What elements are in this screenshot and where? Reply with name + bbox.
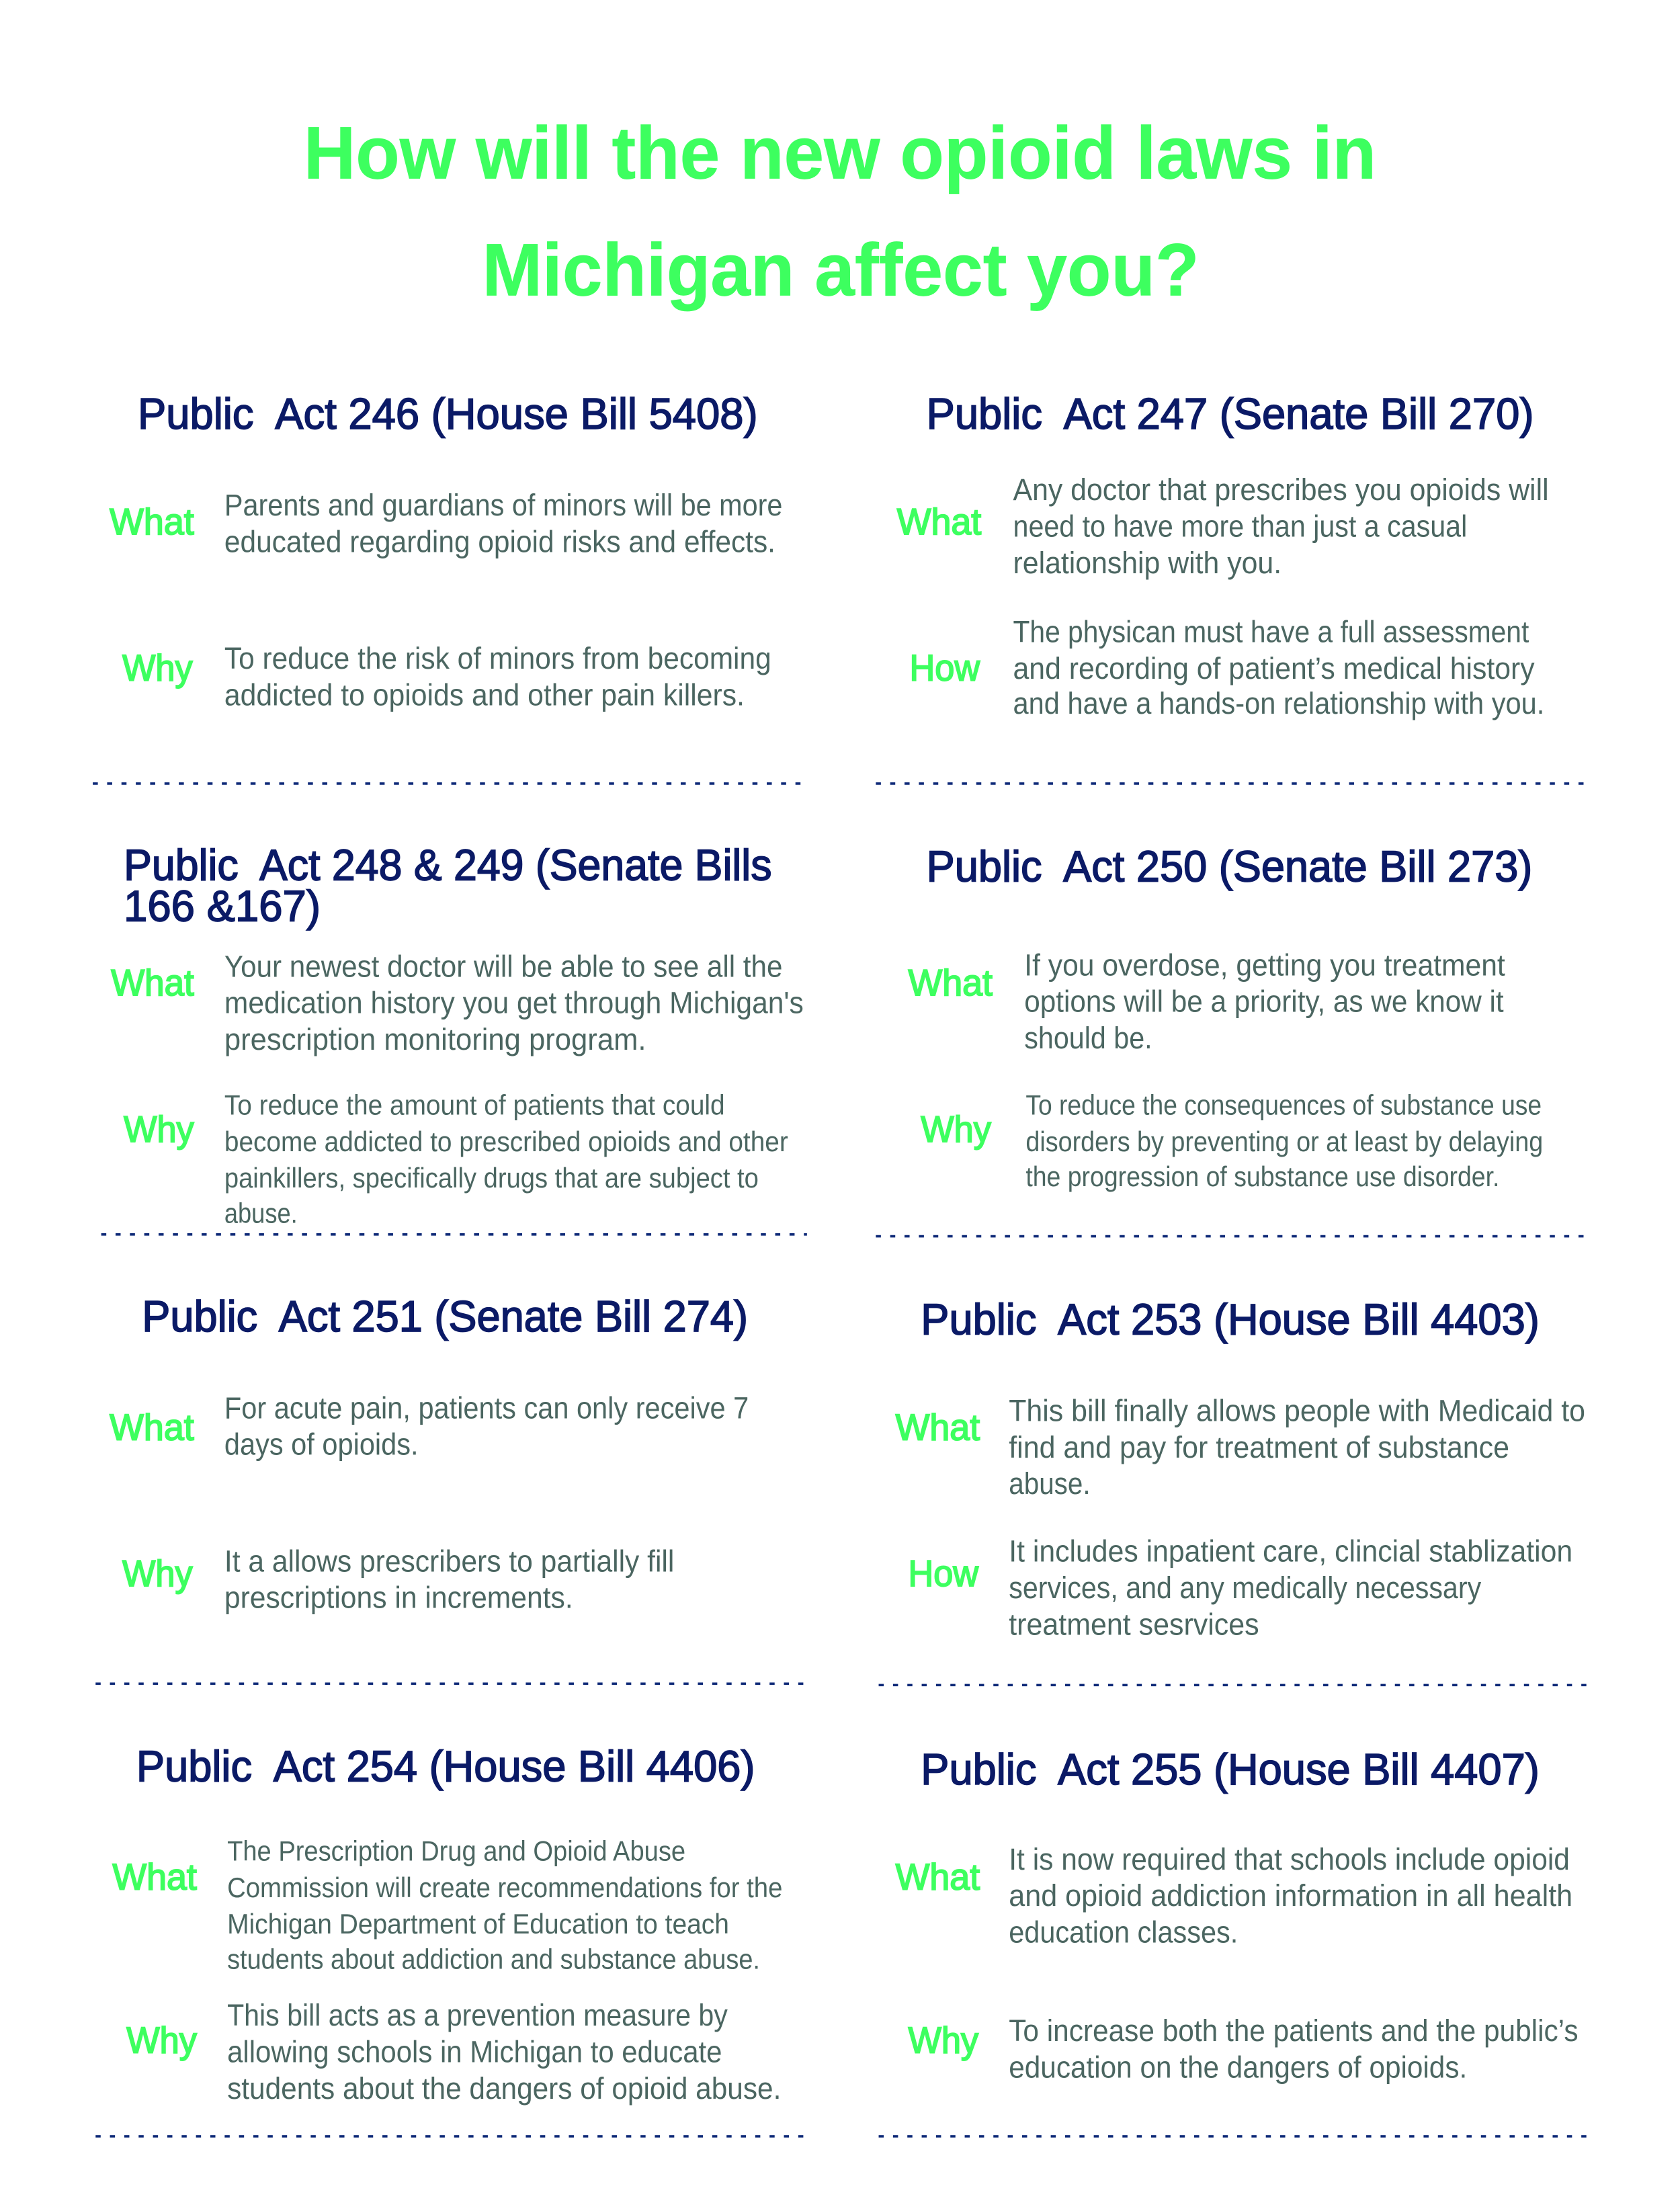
text block: why: the progression of substance use disorder. xyxy=(1025,1161,1499,1192)
text block: what: relationship with you. xyxy=(1013,546,1282,580)
label: What: What xyxy=(110,501,194,542)
label: Why: Why xyxy=(908,2020,979,2061)
panel: Public Act 251 xyxy=(110,1292,749,1615)
heading: Public Act 250: Public Act 250 (Senate Bill 273) xyxy=(927,842,1532,891)
text block: what: Your newest doctor will be able to see all the xyxy=(224,949,782,983)
text block: how: and recording of patient’s medical history xyxy=(1013,651,1535,685)
text block: what: Any doctor that prescribes you opioids will xyxy=(1013,472,1549,507)
label: Why: Why xyxy=(124,1109,194,1150)
label: What: What xyxy=(896,1857,980,1898)
text block: what: The Prescription Drug and Opioid Abuse xyxy=(227,1835,685,1867)
text block: why: To increase both the patients and the public’s xyxy=(1009,2013,1579,2048)
heading: Public Act 248 & 249: Public Act 248 & 249 (Senate Bills xyxy=(124,841,772,890)
text block: what: medication history you get through Michigan's xyxy=(224,986,804,1020)
text block: what: educated regarding opioid risks and effects. xyxy=(224,525,775,559)
text block: what: days of opioids. xyxy=(224,1427,419,1462)
text block: why: disorders by preventing or at least by delaying xyxy=(1025,1126,1543,1157)
text block: what: Michigan Department of Education to teach xyxy=(227,1908,729,1940)
text block: what: options will be a priority, as we know it xyxy=(1024,985,1504,1019)
label: What: What xyxy=(110,1407,194,1448)
heading: Public Act 253: Public Act 253 (House Bill 4403) xyxy=(921,1294,1540,1343)
text block: why xyxy=(224,1089,788,1229)
label: How: How xyxy=(908,1553,979,1594)
panel: Public Act 254 xyxy=(112,1742,782,2106)
panel: Public Act 246 xyxy=(110,389,782,712)
text block: why: allowing schools in Michigan to educate xyxy=(227,2034,722,2069)
heading: Public Act 255: Public Act 255 (House Bill 4407) xyxy=(921,1745,1540,1794)
heading: Public Act 246: Public Act 246 (House Bill 5408) xyxy=(138,389,758,438)
title: How will the new opioid laws in xyxy=(304,112,1376,195)
label: What: What xyxy=(897,501,981,542)
text block: why: become addicted to prescribed opioids and other xyxy=(224,1126,788,1157)
text block: what: For acute pain, patients can only receive 7 xyxy=(224,1390,749,1425)
heading: Public Act 251: Public Act 251 (Senate Bill 274) xyxy=(142,1292,748,1341)
panel: Public Act 255 xyxy=(896,1745,1579,2084)
text block: what: Commission will create recommendations for the xyxy=(227,1872,782,1903)
text block: what xyxy=(1024,948,1505,1055)
text block: why: students about the dangers of opioid abuse. xyxy=(227,2071,781,2106)
heading: Public Act 254: Public Act 254 (House Bill 4406) xyxy=(136,1742,755,1791)
label: Why: Why xyxy=(921,1109,992,1150)
heading: Public Act 248 & 249: 166 &167) xyxy=(124,881,321,930)
text block: what xyxy=(224,949,804,1056)
text block: why: It a allows prescribers to partially fill xyxy=(224,1544,674,1578)
text block: why: To reduce the consequences of substance use xyxy=(1025,1089,1542,1120)
heading: Public Act 247: Public Act 247 (Senate Bill 270) xyxy=(927,389,1534,438)
panel: Public Act 253 xyxy=(896,1294,1585,1641)
text block: why: prescriptions in increments. xyxy=(224,1581,573,1615)
text block: how: It includes inpatient care, clincial stablization xyxy=(1009,1534,1572,1569)
text block: why: To reduce the risk of minors from becoming xyxy=(224,641,771,675)
label: Why: Why xyxy=(122,1553,193,1594)
text block: what: abuse. xyxy=(1009,1466,1091,1501)
text block: what: find and pay for treatment of substance xyxy=(1009,1430,1509,1464)
text block: why: education on the dangers of opioids. xyxy=(1009,2050,1467,2084)
label: How: How xyxy=(910,648,980,689)
text block: what xyxy=(227,1835,782,1974)
text block: how xyxy=(1013,614,1544,720)
text block: what xyxy=(1009,1393,1585,1501)
heading: Public Act 248 & 249 xyxy=(124,841,772,930)
text block: how: services, and any medically necessary xyxy=(1009,1571,1482,1605)
text block: why xyxy=(227,1998,781,2106)
label: What: What xyxy=(112,1857,197,1898)
text block: why: To reduce the amount of patients that could xyxy=(224,1089,725,1120)
text block: why xyxy=(1025,1089,1543,1192)
panel: Public Act 250 xyxy=(908,842,1543,1192)
label: What: What xyxy=(908,962,993,1003)
panel: Public Act 248 & 249 xyxy=(111,841,804,1229)
text block: what: Parents and guardians of minors will be more xyxy=(224,488,782,522)
text block: what: education classes. xyxy=(1009,1915,1238,1950)
text block: why xyxy=(224,641,771,712)
text block: what: prescription monitoring program. xyxy=(224,1022,646,1056)
text block: how: treatment sesrvices xyxy=(1009,1607,1259,1641)
text block: how: The physican must have a full assessment xyxy=(1013,614,1529,649)
text block: why: painkillers, specifically drugs that are subject to xyxy=(224,1162,759,1194)
title: Michigan affect you? xyxy=(482,228,1200,311)
text block: how xyxy=(1009,1534,1572,1641)
text block: what: If you overdose, getting you treatment xyxy=(1024,948,1505,982)
text block: what: It is now required that schools include opioid xyxy=(1009,1842,1570,1876)
text block: what: should be. xyxy=(1024,1021,1152,1055)
text block: what xyxy=(224,1390,749,1462)
title xyxy=(304,112,1376,311)
label: What: What xyxy=(111,962,194,1003)
text block: what xyxy=(1009,1842,1572,1950)
text block: why: This bill acts as a prevention measure by xyxy=(227,1998,728,2032)
text block: how: and have a hands-on relationship with you. xyxy=(1013,686,1544,720)
text block: what xyxy=(224,488,782,559)
text block: what: This bill finally allows people with Medicaid to xyxy=(1009,1393,1585,1427)
label: What: What xyxy=(896,1407,980,1448)
text block: what: need to have more than just a casual xyxy=(1013,509,1467,544)
text block: why xyxy=(224,1544,674,1615)
text block: what xyxy=(1013,472,1549,580)
text block: why: addicted to opioids and other pain killers. xyxy=(224,678,745,712)
text block: what: students about addiction and substance abuse. xyxy=(227,1943,760,1974)
label: Why: Why xyxy=(126,2020,198,2061)
text block: why xyxy=(1009,2013,1579,2084)
panel: Public Act 247 xyxy=(897,389,1549,720)
text block: what: and opioid addiction information in all health xyxy=(1009,1878,1572,1913)
text block: why: abuse. xyxy=(224,1197,298,1229)
label: Why: Why xyxy=(122,648,193,689)
